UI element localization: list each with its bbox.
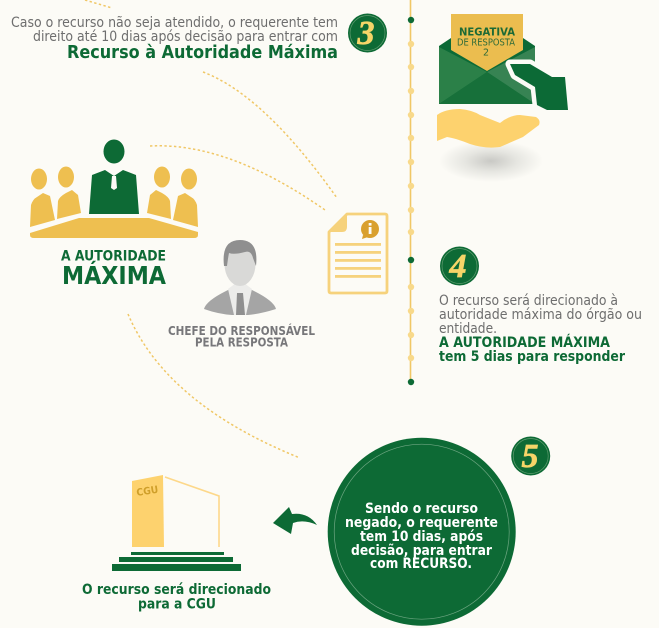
caption: CGU: para a CGU xyxy=(138,596,216,612)
step 5 circle: Sendo o recurso xyxy=(365,501,478,517)
heading: authority: A AUTORIDADE xyxy=(61,248,166,264)
heading: authority xyxy=(61,248,167,290)
icon: envelope with denial letter xyxy=(439,14,568,182)
step 3 text: Recurso à Autoridade Máxima xyxy=(67,43,338,63)
badge: step 4: 4 xyxy=(448,248,466,285)
badge: step 4 xyxy=(440,246,479,286)
label: manager xyxy=(168,323,315,350)
icon: envelope with denial letter: NEGATIVA xyxy=(459,26,516,38)
label: manager: CHEFE DO RESPONSÁVEL xyxy=(168,323,315,338)
step 4 text: A AUTORIDADE MÁXIMA xyxy=(439,334,610,351)
step 4 text xyxy=(439,293,642,365)
dotted connector: step 3 to document xyxy=(203,72,337,198)
icon: envelope with denial letter: 2 xyxy=(483,48,489,58)
timeline xyxy=(408,0,414,385)
icon: yellow hand xyxy=(437,109,540,148)
heading: authority: MÁXIMA xyxy=(62,261,167,290)
icon: CGU building: CGU xyxy=(136,485,159,499)
step 3 text: direito até 10 dias após decisão para entrar com xyxy=(33,29,338,45)
step 4 text: autoridade máxima do órgão ou xyxy=(439,307,642,323)
icon: document xyxy=(329,214,387,293)
step 3 text: Caso o recurso não seja atendido, o requerente tem xyxy=(11,15,338,31)
caption: CGU xyxy=(82,582,271,612)
step 5 circle: com RECURSO. xyxy=(370,556,472,572)
icon: green hand xyxy=(510,64,568,110)
badge: step 3: 3 xyxy=(356,15,374,52)
step 4 text: tem 5 dias para responder xyxy=(439,349,625,365)
arrow xyxy=(273,507,317,534)
badge: step 3 xyxy=(348,14,387,52)
step 3 text xyxy=(11,15,338,63)
step 4 text: entidade. xyxy=(439,321,497,337)
step 5 circle xyxy=(328,438,516,626)
label: manager: PELA RESPOSTA xyxy=(195,336,289,350)
icon: envelope with denial letter: DE RESPOSTA xyxy=(457,38,515,48)
dotted connector: authority to step 5 xyxy=(128,314,300,458)
icon: CGU building xyxy=(112,475,241,571)
dotted connector: authority to document xyxy=(150,146,325,210)
caption: CGU: O recurso será direcionado xyxy=(82,582,271,598)
step 5 circle: negado, o requerente xyxy=(345,515,498,531)
icon: authority meeting xyxy=(30,140,198,238)
dotted connector: top xyxy=(85,0,112,8)
icon: grey manager xyxy=(204,240,276,315)
badge: step 5 xyxy=(511,436,550,476)
step 4 text: O recurso será direcionado à xyxy=(439,293,618,309)
badge: step 5: 5 xyxy=(522,438,538,475)
step 5 circle: decisão, para entrar xyxy=(351,543,492,559)
step 5 circle: tem 10 dias, após xyxy=(360,529,483,545)
